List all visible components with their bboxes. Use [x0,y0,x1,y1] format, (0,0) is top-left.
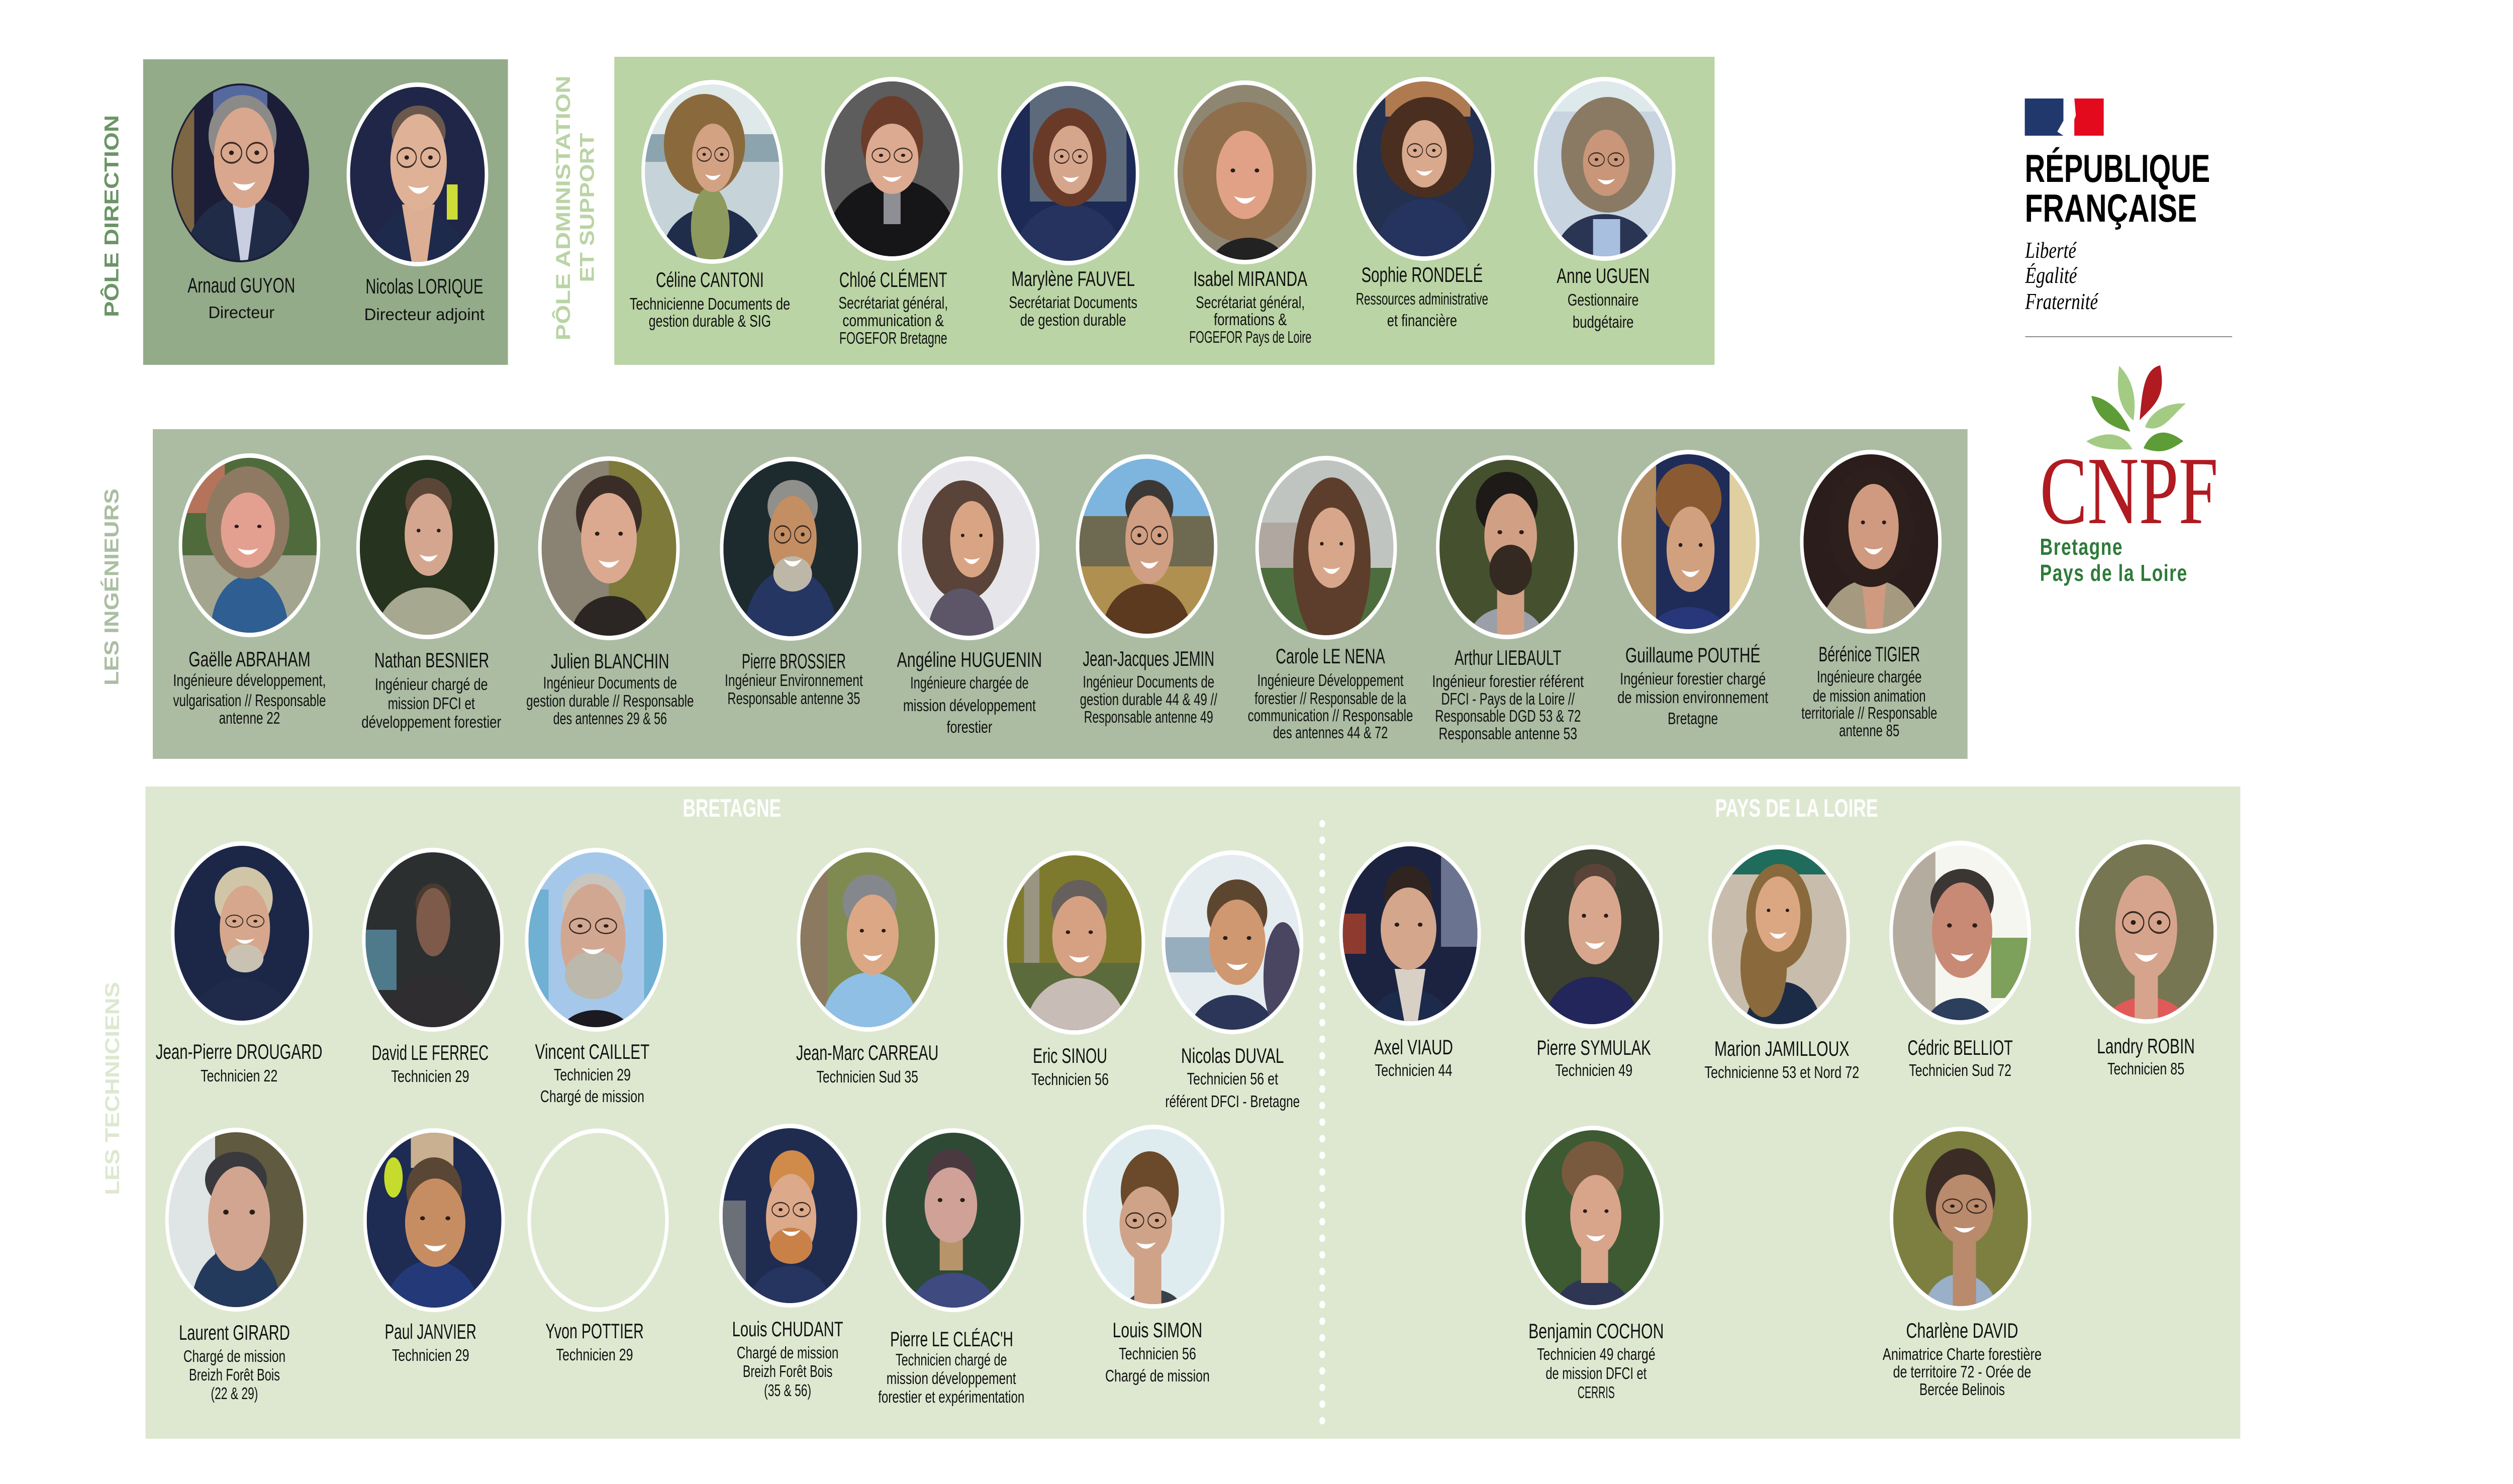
role: Technicien 85 [2107,1060,2184,1078]
role: Technicien 44 [1375,1061,1452,1080]
name: Carole LE NENA [1276,644,1385,668]
role: Ingénieur Environnement [725,671,863,690]
role: DFCI - Pays de la Loire // [1441,690,1575,709]
role [903,674,1036,737]
person: Paul JANVIER [363,1128,505,1371]
role: Bercée Belinois [1919,1380,2005,1399]
person: Marion JAMILLOUX [1704,845,1859,1082]
role: Ingénieure développement, [173,671,326,690]
photo: Nicolas LORIQUE [347,82,489,266]
name: Gaëlle ABRAHAM [188,647,311,671]
name: Charlène DAVID [1906,1319,2018,1342]
role: Ingénieure Développement [1258,671,1403,690]
name: Jean-Jacques JEMIN [1083,647,1214,670]
role: de mission animation [1813,687,1926,706]
name: Guillaume POUTHÉ [1625,643,1761,667]
person: Guillaume POUTHÉ [1617,450,1768,728]
name: Isabel MIRANDA [1193,267,1307,290]
role: Technicien 29 [391,1067,469,1086]
role: Secrétariat Documents [1009,293,1137,312]
photo: Sophie RONDELÉ [1353,77,1495,310]
role [540,1066,644,1106]
name: Paul JANVIER [384,1320,476,1343]
role: Ressources administrative [1356,290,1488,309]
heading: Pays de la Loire: PAYS DE LA LOIRE [1715,795,1878,822]
photo: Anne UGUEN [1534,77,1676,305]
role: gestion durable 44 & 49 // [1080,690,1218,709]
person: Julien BLANCHIN [526,456,694,728]
panel: pôle direction [143,59,508,365]
name: Jean-Marc CARREAU [796,1041,938,1064]
region label: Pays de la Loire [2040,560,2187,586]
name: Axel VIAUD [1374,1035,1453,1059]
panel: les ingénieurs [153,429,1968,759]
role: des antennes 29 & 56 [553,710,667,728]
motto: Égalité [2025,262,2078,288]
role [1165,1070,1300,1111]
role: Technicien 56 et [1187,1070,1278,1089]
name: Landry ROBIN [2097,1034,2195,1058]
person: Axel VIAUD [1339,842,1481,1080]
person: Céline CANTONI [630,80,790,331]
person: Yvon POTTIER [529,1131,667,1364]
role: Responsable antenne 53 [1439,725,1577,743]
role: Chargé de mission [1105,1367,1210,1386]
person: David LE FERREC [362,848,504,1086]
photo: Marylène FAUVEL [998,81,1139,314]
name: Arthur LIEBAULT [1455,646,1562,669]
person: Pierre BROSSIER [720,457,863,708]
role: CERRIS [1578,1383,1615,1402]
name: Laurent GIRARD [179,1321,290,1344]
role: antenne 22 [219,709,280,728]
role: Bretagne [1668,710,1718,728]
role: mission DFCI et [388,695,475,713]
role: Chargé de mission [183,1347,285,1366]
role: (35 & 56) [764,1381,811,1400]
photo: Carole LE NENA [1255,456,1397,648]
person: Vincent CAILLET [525,848,666,1106]
photo: Jean-Pierre DROUGARD [171,841,313,1074]
name: Sophie RONDELÉ [1362,263,1483,286]
logo: CNPF [2040,365,2218,586]
role: Ingénieure chargée de [910,674,1029,692]
role: Animatrice Charte forestière [1883,1345,2042,1364]
panel: les techniciens [145,786,2240,1439]
motto: Fraternité [2025,288,2099,314]
name: Marylène FAUVEL [1011,267,1135,290]
person: Jean-Marc CARREAU [796,848,938,1086]
person: Laurent GIRARD [165,1128,307,1403]
role: de mission environnement [1617,688,1768,707]
name: Angéline HUGUENIN [897,648,1042,671]
person: Gaëlle ABRAHAM [173,453,326,728]
role: de gestion durable [1020,311,1126,330]
name: Cédric BELLIOT [1907,1036,2013,1059]
photo: David LE FERREC [362,848,504,1085]
name: Nicolas DUVAL [1181,1044,1284,1067]
person: Jean-Jacques JEMIN [1076,454,1218,727]
photo: Louis SIMON [1083,1125,1224,1350]
name: Pierre LE CLÉAC'H [890,1327,1013,1351]
photo: Guillaume POUTHÉ [1618,450,1760,677]
role [1801,668,1937,740]
role [1009,293,1137,330]
name: Arnaud GUYON [187,273,295,297]
role: forestier // Responsable de la [1254,689,1406,708]
region label: Bretagne [2040,534,2122,560]
role: Technicienne Documents de [630,295,790,314]
wordmark: FRANÇAISE [2025,186,2197,230]
role: Ingénieur forestier chargé [1620,670,1766,688]
role: Responsable antenne 49 [1084,708,1213,727]
role: Directeur adjoint [364,306,485,324]
role: FOGEFOR Bretagne [839,329,947,348]
logo: République Française [2025,98,2210,314]
role [1568,291,1638,332]
name: Jean-Pierre DROUGARD [156,1040,323,1063]
heading: les ingénieurs: LES INGÉNIEURS [100,488,123,685]
heading: les techniciens: LES TECHNICIENS [101,982,124,1195]
role: Responsable antenne 35 [727,689,860,708]
name: David LE FERREC [372,1041,489,1064]
person: Nicolas LORIQUE [347,82,488,324]
role [630,295,790,331]
role [1883,1345,2042,1399]
role: Ingénieur Documents de [1083,673,1214,691]
photo: Charlène DAVID [1890,1127,2032,1354]
person: Cédric BELLIOT [1889,841,2031,1080]
heading: pôle administration et support: PÔLE ADMINISTATION [552,75,574,341]
role: et financière [1387,312,1457,330]
name: Céline CANTONI [656,268,764,291]
person: Jean-Pierre DROUGARD [156,841,323,1085]
role [1189,293,1311,347]
motto: Liberté [2025,237,2077,263]
role: des antennes 44 & 72 [1273,724,1388,742]
photo: Marion JAMILLOUX [1708,845,1850,1082]
role [1617,670,1768,728]
person: Angéline HUGUENIN [897,456,1042,737]
name: Louis CHUDANT [732,1317,843,1341]
role: mission développement [887,1369,1016,1388]
person: Anne UGUEN [1534,77,1676,332]
name: Louis SIMON [1113,1318,1202,1342]
name: Marion JAMILLOUX [1714,1037,1850,1060]
person: Arthur LIEBAULT [1432,455,1584,743]
photo: Vincent CAILLET [525,848,666,1070]
photo: Louis CHUDANT [719,1124,861,1356]
person: Benjamin COCHON [1522,1126,1664,1402]
role: (22 & 29) [211,1384,258,1403]
role: Chargé de mission [540,1087,644,1106]
heading: Bretagne: BRETAGNE [683,795,781,822]
role: gestion durable // Responsable [526,692,694,711]
person: Isabel MIRANDA [1174,80,1316,347]
role [183,1347,285,1403]
role: mission développement [903,697,1036,715]
role [1356,290,1488,330]
name: Pierre BROSSIER [742,649,846,673]
role: Technicienne 53 et Nord 72 [1704,1063,1859,1082]
role: communication & [842,312,944,330]
role: antenne 85 [1839,722,1899,740]
photo: Chloé CLÉMENT [821,77,963,261]
role: Breizh Forêt Bois [189,1366,280,1384]
role: territoriale // Responsable [1801,704,1937,723]
photo: Angéline HUGUENIN [898,456,1039,679]
photo: Julien BLANCHIN [538,456,680,686]
panel: pôle administration et support [614,57,1714,365]
person: Charlène DAVID [1883,1127,2042,1399]
name: Benjamin COCHON [1528,1319,1664,1343]
role: forestier [946,718,992,737]
photo: Isabel MIRANDA [1174,80,1316,298]
wordmark: CNPF [2040,438,2218,545]
role: Technicien 29 [556,1346,633,1364]
region label [2040,534,2187,586]
person: Pierre SYMULAK [1521,845,1663,1080]
role [1248,671,1413,742]
person: Pierre LE CLÉAC'H [878,1128,1024,1407]
role: vulgarisation // Responsable [173,691,326,710]
photo placeholder: empty ring [529,1131,667,1310]
person: Landry ROBIN [2075,840,2217,1078]
person: Louis CHUDANT [719,1124,861,1400]
role: Secrétariat général, [1196,293,1305,312]
role [878,1351,1024,1407]
role [838,294,948,348]
person: Louis SIMON [1083,1125,1224,1386]
role [1432,672,1584,743]
role: budgétaire [1573,313,1633,332]
photo: Landry ROBIN [2075,840,2217,1067]
name: Yvon POTTIER [545,1319,644,1343]
person: Eric SINOU [1004,851,1145,1089]
role: Technicien 29 [392,1346,469,1365]
photo: Céline CANTONI [641,80,783,264]
role: développement forestier [361,713,501,732]
photo: Nicolas DUVAL [1162,850,1303,1080]
photo: Cédric BELLIOT [1889,841,2031,1068]
role: Technicien 56 [1119,1345,1196,1363]
role [173,671,326,728]
name: Nicolas LORIQUE [365,274,483,298]
role: Technicien 49 [1555,1061,1632,1080]
photo: Axel VIAUD [1339,842,1481,1069]
role [1537,1345,1656,1402]
role: Technicien 49 chargé [1537,1345,1656,1364]
name: Nathan BESNIER [374,648,489,672]
person: Arnaud GUYON [171,83,309,322]
name: Julien BLANCHIN [551,649,669,673]
photo: Jean-Jacques JEMIN [1076,454,1217,684]
role: Technicien Sud 72 [1909,1061,2011,1080]
heading: pôle administration et support: ET SUPPORT [575,133,598,282]
role [737,1344,838,1400]
heading: pôle administration et support [552,75,598,341]
role: référent DFCI - Bretagne [1165,1093,1300,1111]
role: Technicien 29 [554,1066,631,1084]
photo: Gaëlle ABRAHAM [179,453,320,686]
role: Technicien Sud 35 [816,1068,918,1086]
role [361,675,501,732]
role: Ingénieur chargé de [375,675,488,694]
role: Technicien chargé de [896,1351,1007,1369]
role: FOGEFOR Pays de Loire [1189,328,1311,347]
name: Chloé CLÉMENT [839,268,947,291]
photo: Benjamin COCHON [1522,1126,1664,1348]
role: Ingénieure chargée [1817,668,1922,686]
role: communication // Responsable [1248,707,1413,725]
role: Responsable DGD 53 & 72 [1435,707,1581,726]
photo: Pierre BROSSIER [720,457,861,700]
role: gestion durable & SIG [649,312,771,331]
role: Chargé de mission [737,1344,838,1362]
photo: Arnaud GUYON [171,83,309,262]
role: Gestionnaire [1568,291,1638,310]
name: Eric SINOU [1033,1044,1107,1067]
role: Directeur [208,304,274,322]
role [725,671,863,708]
wordmark [2025,146,2210,230]
photo: Paul JANVIER [363,1128,505,1371]
role: Secrétariat général, [838,294,948,313]
person: Nathan BESNIER [356,455,501,732]
heading: pôle direction: PÔLE DIRECTION [100,115,123,317]
person: Chloé CLÉMENT [821,77,963,348]
wordmark: RÉPUBLIQUE [2025,146,2210,190]
person: Sophie RONDELÉ [1353,77,1495,330]
role: Technicien 22 [201,1067,277,1085]
icon: French flag [2025,98,2104,136]
photo: Arthur LIEBAULT [1436,455,1578,678]
name: Bérénice TIGIER [1818,642,1920,666]
role: forestier et expérimentation [878,1388,1024,1407]
icon: leaves [2086,365,2186,451]
person: Bérénice TIGIER [1800,450,1942,740]
person: Nicolas DUVAL [1162,850,1303,1111]
photo: Jean-Marc CARREAU [797,848,938,1083]
role: de mission DFCI et [1545,1364,1647,1383]
name: Anne UGUEN [1557,264,1650,287]
photo: Nathan BESNIER [356,455,498,683]
person: Marylène FAUVEL [998,81,1139,330]
role: Technicien 56 [1031,1070,1109,1089]
photo: Pierre LE CLÉAC'H [883,1128,1024,1358]
role: Ingénieur Documents de [543,674,677,692]
name: Vincent CAILLET [535,1040,649,1063]
role: Ingénieur forestier référent [1432,672,1584,691]
person: Carole LE NENA [1248,456,1413,742]
photo: Bérénice TIGIER [1800,450,1942,690]
role [1080,673,1218,727]
photo: Pierre SYMULAK [1521,845,1663,1077]
photo: Laurent GIRARD [165,1128,307,1368]
role [526,674,694,728]
name: Pierre SYMULAK [1537,1036,1651,1059]
photo: Eric SINOU [1004,851,1145,1083]
motto [2025,237,2099,314]
role [1105,1345,1210,1386]
dotted divider [1318,824,1326,1422]
role: de territoire 72 - Orée de [1893,1363,2031,1381]
role: Breizh Forêt Bois [743,1362,832,1381]
role: formations & [1214,311,1287,329]
